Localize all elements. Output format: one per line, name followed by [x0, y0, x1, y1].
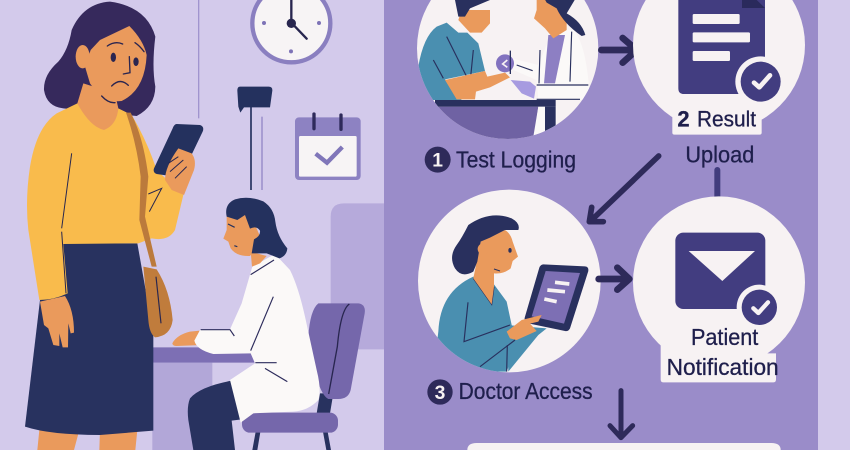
label: step 4: Patient	[691, 324, 759, 350]
doctor coat	[582, 88, 589, 100]
tablet	[525, 264, 588, 331]
figure: worried woman with phone	[25, 2, 203, 450]
tablet hand back	[507, 325, 547, 372]
neck	[251, 252, 267, 267]
sweater	[27, 103, 183, 300]
desk	[152, 347, 257, 450]
step 2: result upload: Result	[697, 106, 756, 131]
icon: document	[678, 0, 765, 94]
arrow: step 2 to 3	[589, 156, 659, 222]
arrow: down to next step	[610, 391, 633, 438]
hanging hand	[40, 296, 74, 347]
neck	[77, 83, 118, 130]
shirt	[438, 276, 512, 372]
hand	[172, 331, 202, 346]
legs	[37, 430, 137, 450]
step 3: doctor access	[418, 190, 601, 372]
wall line	[197, 0, 201, 118]
step 2: result upload	[633, 0, 805, 168]
table	[435, 107, 538, 142]
step 1: test logging	[417, 0, 598, 142]
hand on phone	[165, 148, 195, 195]
trousers	[188, 381, 242, 450]
bag strap	[126, 113, 157, 267]
head	[223, 213, 262, 256]
icon: check badge	[735, 56, 786, 107]
step 4: patient notification	[633, 196, 805, 382]
wall panel	[331, 203, 384, 349]
label: step 3: Doctor Access	[459, 378, 593, 404]
skirt	[25, 243, 153, 435]
panel: waiting room scene	[0, 0, 384, 450]
chair	[242, 303, 365, 450]
doctor face details	[228, 224, 237, 247]
face	[85, 26, 147, 101]
arrow: step 3 to 4	[599, 268, 629, 290]
glove	[511, 80, 536, 99]
icon: clock	[252, 0, 330, 62]
step 4: patient notification: Notification	[667, 354, 779, 380]
figure: seated doctor	[172, 198, 365, 450]
doctor head	[534, 0, 567, 38]
label: step 3: 3	[435, 383, 446, 404]
connector	[708, 170, 726, 200]
workflow top row	[417, 0, 805, 222]
patient shirt	[418, 23, 485, 100]
step 2: result upload: Upload	[685, 142, 754, 168]
neck and head	[473, 230, 518, 304]
icon: calendar	[295, 114, 361, 180]
icon: envelope	[675, 233, 765, 309]
icon: check badge	[737, 285, 782, 330]
workflow bottom row	[418, 190, 805, 450]
shoulder bag	[143, 267, 173, 337]
final step box	[467, 443, 781, 450]
hand	[507, 315, 542, 340]
ear	[76, 45, 90, 68]
patient arm	[445, 71, 510, 99]
lab coat	[194, 254, 320, 423]
label: step 1: Test Logging	[456, 147, 576, 173]
phone	[154, 124, 203, 177]
device	[496, 54, 514, 72]
label: step 2: 2	[677, 106, 690, 131]
facial features	[102, 43, 144, 103]
icon: wall lamp	[237, 87, 272, 190]
label: step 1: 1	[432, 151, 443, 172]
panel: workflow background	[384, 0, 818, 450]
patient head	[458, 10, 490, 33]
hair back	[44, 2, 155, 116]
hair	[452, 215, 519, 274]
arrow: step 1 to 2	[601, 38, 637, 63]
hair	[226, 198, 287, 258]
